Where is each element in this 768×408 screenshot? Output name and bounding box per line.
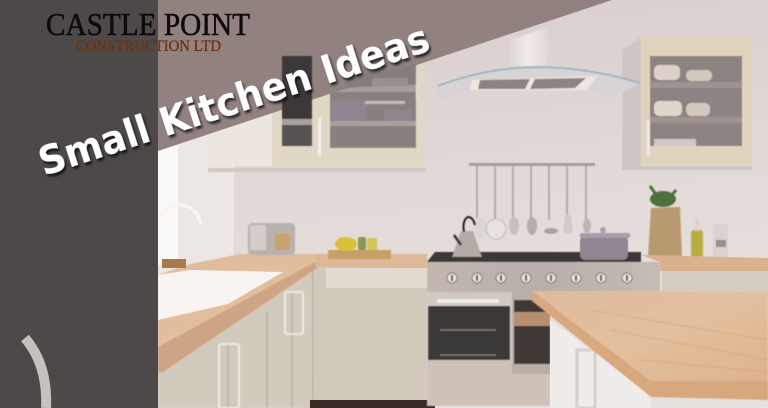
logo subtitle: CONSTRUCTION LTD <box>76 38 221 55</box>
range cooker <box>427 252 660 406</box>
cooker hood <box>436 27 640 101</box>
title: Small Kitchen Ideas <box>33 17 435 186</box>
back right worktop <box>641 255 768 271</box>
utensil rail <box>469 163 595 239</box>
toaster <box>248 223 295 255</box>
worktop left <box>158 254 427 372</box>
tap <box>159 205 201 224</box>
logo <box>46 6 250 55</box>
kettle <box>452 217 482 257</box>
floor <box>310 400 435 408</box>
wooden board by sink <box>162 259 186 268</box>
island cabinet <box>550 320 768 408</box>
logo name: CASTLE POINT <box>46 6 250 42</box>
icon: fridge handle <box>25 338 46 408</box>
casserole pot <box>580 227 630 260</box>
bottles <box>691 218 728 258</box>
diagonal banner <box>158 0 612 151</box>
chopping board with lemons <box>328 237 391 259</box>
upper cabinets left <box>208 60 425 172</box>
island worktop <box>532 291 768 400</box>
glass cabinet door <box>282 56 312 146</box>
back base cabinet <box>315 266 768 402</box>
sink <box>158 270 283 320</box>
left base cabinets <box>158 268 317 408</box>
right wall cabinet <box>622 37 752 170</box>
fridge door <box>0 0 158 408</box>
herb plant in paper bag <box>648 186 682 256</box>
cabinet top remaining above banner <box>345 63 425 100</box>
side wall and window <box>158 120 234 280</box>
